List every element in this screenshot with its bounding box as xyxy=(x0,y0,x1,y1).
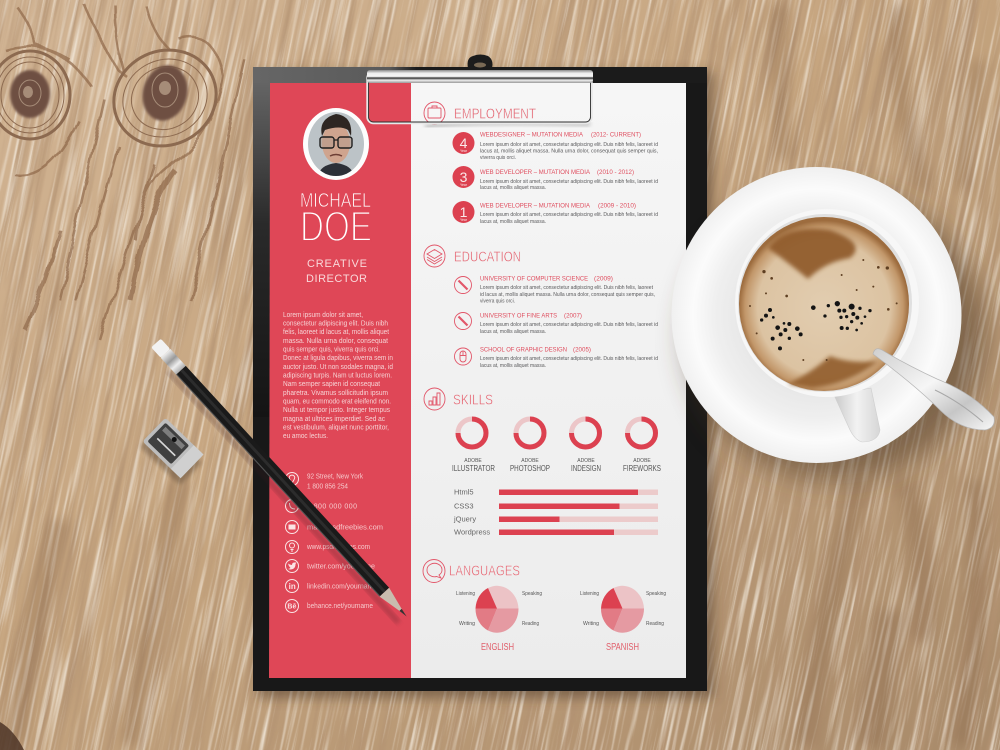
bar: wordpress xyxy=(454,528,658,537)
school entry 2: Lorem ipsum dolor sit amet, consectetur adipiscing elit. Duis nibh felis, laoreet id xyxy=(480,322,658,328)
job entry 1: (2012- CURRENT) xyxy=(591,132,641,138)
heading: education: EDUCATION xyxy=(454,248,521,266)
job title: DIRECTOR xyxy=(306,273,367,285)
school entry 2: (2007) xyxy=(564,312,582,320)
icon: speech bubble xyxy=(423,560,445,582)
job entry 2: (2010 - 2012) xyxy=(597,169,634,176)
pie chart: english: Speaking xyxy=(522,591,542,597)
school entry 3 xyxy=(454,346,658,369)
donut labels: INDESIGN xyxy=(571,464,601,473)
profile paragraph: Lorem ipsum dolor sit amet, xyxy=(283,312,363,319)
icon: layers xyxy=(424,245,445,267)
pencil body xyxy=(176,366,389,597)
profile paragraph: consectetur adipiscing elit. Duis nibh xyxy=(283,320,388,328)
heading: employment: EMPLOYMENT xyxy=(454,106,536,122)
school entry 1: Lorem ipsum dolor sit amet, consectetur adipiscing elit. Duis nibh felis, laoreet xyxy=(480,285,654,291)
job entry 1 xyxy=(452,132,658,161)
name xyxy=(300,190,372,251)
profile paragraph xyxy=(283,312,393,440)
contact: linkedin: in xyxy=(289,582,296,591)
donut labels: ILLUSTRATOR xyxy=(452,464,495,473)
school entry 2: lacus at, mollis aliquet massa. xyxy=(480,329,546,335)
job entry 2 xyxy=(452,166,658,191)
contact list xyxy=(286,472,383,612)
donut labels: PHOTOSHOP xyxy=(510,464,550,473)
job entry 3: Lorem ipsum dolor sit amet, consectetur adipiscing elit. Duis nibh felis, laoreet id xyxy=(480,212,658,218)
contact: linkedin xyxy=(286,580,377,592)
contact: behance xyxy=(286,600,373,612)
profile photo xyxy=(303,108,369,180)
skill bars xyxy=(453,488,658,537)
spoon xyxy=(873,349,994,430)
profile paragraph: est vestibulum, aliquet nunc porttitor, xyxy=(283,424,389,432)
school entry 3: SCHOOL OF GRAPHIC DESIGN xyxy=(480,346,567,354)
job entry 1: Year xyxy=(460,149,468,153)
job entry 3: lacus at, mollis aliquet massa. xyxy=(480,219,546,225)
clipboard board xyxy=(253,67,714,698)
wood knots xyxy=(0,33,232,163)
bar: wordpress: Wordpress xyxy=(454,528,490,537)
icon: bar chart xyxy=(424,388,445,410)
donut: fireworks xyxy=(628,419,656,447)
donut labels xyxy=(452,458,661,473)
job entry 1: WEBDESIGNER – MUTATION MEDIA xyxy=(480,132,584,138)
pie chart: spanish xyxy=(580,586,666,653)
profile paragraph: Nam semper sapien id consequat xyxy=(283,381,380,388)
school entry 1: id lacus at, mollis aliquet massa. Nulla urna dolor, consequat quis semper quis, xyxy=(480,292,655,298)
pencil sharpener xyxy=(139,418,207,485)
section: languages xyxy=(423,560,666,653)
profile paragraph: adipiscing turpis. Nam ut luctus lorem. xyxy=(283,372,392,380)
contact: phone: 1 800 000 000 xyxy=(307,504,357,510)
contact: address: 92 Street, New York xyxy=(307,474,363,480)
contact: email: mail@psdfreebies.com xyxy=(307,524,383,532)
coffee xyxy=(739,217,909,391)
contact: twitter: twitter.com/yourname xyxy=(307,564,375,570)
school entry 1: (2009) xyxy=(594,276,613,282)
job entry 3: Year xyxy=(460,218,468,222)
contact: linkedin: linkedin.com/yourname xyxy=(307,584,377,590)
heading: skills: SKILLS xyxy=(453,392,493,408)
contact: behance: Bē xyxy=(287,604,296,611)
contact: address: 1 800 856 254 xyxy=(307,484,348,490)
saucer shadow xyxy=(685,190,985,480)
job entry 3: (2009 - 2010) xyxy=(598,202,636,210)
contact: website: www.psdfreebies.com xyxy=(306,544,370,551)
job entry 2: lacus at, mollis aliquet massa. xyxy=(480,185,546,191)
pie chart: spanish: Listening xyxy=(580,591,599,597)
pie chart: spanish: Writing xyxy=(583,621,599,627)
donut labels: ADOBE xyxy=(521,458,539,464)
job entry 3: WEB DEVELOPER – MUTATION MEDIA xyxy=(480,202,591,210)
heading: languages: LANGUAGES xyxy=(449,562,520,580)
contact: behance: behance.net/yourname xyxy=(307,603,373,610)
pie chart: english: Writing xyxy=(459,621,475,627)
pie chart: spanish: Speaking xyxy=(646,591,666,597)
profile paragraph: Donec at ligula dapibus, viverra sem in xyxy=(283,355,393,362)
bar: html5: Html5 xyxy=(454,488,474,497)
profile paragraph: eu amoc lectus. xyxy=(283,433,328,440)
coffee cup and saucer xyxy=(672,167,994,480)
saucer xyxy=(672,167,962,463)
pie chart: english: Listening xyxy=(456,591,475,597)
icon: briefcase xyxy=(424,102,445,124)
job entry 2: 3 xyxy=(460,169,468,185)
school entry 1: viverra quis orci. xyxy=(480,298,515,304)
job entry 3 xyxy=(452,201,658,225)
ferrule xyxy=(161,349,186,375)
metal clip xyxy=(367,54,593,127)
profile paragraph: massa. Nulla urna dolor, consequat xyxy=(283,338,388,345)
donut labels: ADOBE xyxy=(633,458,651,464)
pencil xyxy=(151,339,411,625)
donut labels: ADOBE xyxy=(464,458,482,464)
section: education xyxy=(424,245,658,369)
panel: red sidebar xyxy=(269,83,411,678)
cup rim xyxy=(735,209,919,397)
job entry 2: Lorem ipsum dolor sit amet, consectetur adipiscing elit. Duis nibh felis, laoreet id xyxy=(480,179,658,185)
profile paragraph: quis semper quis, viverra quis orci. xyxy=(283,346,380,354)
school entry 2: UNIVERSITY OF FINE ARTS xyxy=(480,312,558,320)
pencil tip xyxy=(380,588,405,614)
school entry 3: lacus at, mollis aliquet massa. xyxy=(480,363,546,369)
pie chart: spanish: SPANISH xyxy=(606,642,639,653)
donut: photoshop xyxy=(516,419,544,447)
school entry 1 xyxy=(454,276,655,304)
bar: css3: CSS3 xyxy=(454,502,474,510)
job entry 2: WEB DEVELOPER – MUTATION MEDIA xyxy=(480,169,591,176)
job entry 2: Year xyxy=(460,183,468,187)
school entry 2 xyxy=(454,312,658,335)
profile paragraph: auctor justo. Ut non sodales magna, id xyxy=(283,364,393,371)
school entry 3: (2005) xyxy=(573,346,591,354)
contact: address xyxy=(286,472,363,490)
job entry 1: 4 xyxy=(460,135,468,151)
bar: jquery xyxy=(453,514,658,524)
eraser xyxy=(151,339,170,358)
name: DOE xyxy=(300,203,372,251)
donut labels: FIREWORKS xyxy=(623,464,661,473)
pie chart: english: Reading xyxy=(522,621,539,627)
paper sheet xyxy=(411,83,686,678)
profile paragraph: magna at ultrices imperdiet. Sed ac xyxy=(283,416,385,423)
section: skills xyxy=(424,388,661,537)
bar: html5 xyxy=(454,488,658,497)
pie chart: spanish: Reading xyxy=(646,621,664,627)
profile paragraph: Nulla ut tempor justo. Integer tempus xyxy=(283,407,390,414)
job entry 3: 1 xyxy=(460,204,468,220)
bar: css3 xyxy=(454,502,658,510)
job entry 1: viverra quis orci. xyxy=(480,155,516,161)
name: MICHAEL xyxy=(300,190,371,212)
job title xyxy=(306,258,367,285)
donut labels: ADOBE xyxy=(577,458,595,464)
donut: indesign xyxy=(572,419,600,447)
job entry 1: Lorem ipsum dolor sit amet, consectetur adipiscing elit. Duis nibh felis, laoreet id xyxy=(480,142,658,148)
bar: jquery: jQuery xyxy=(453,514,476,524)
cup handle xyxy=(834,388,880,442)
school entry 1: UNIVERSITY OF COMPUTER SCIENCE xyxy=(480,276,589,282)
profile paragraph: quam, eu commodo erat eleifend non. xyxy=(283,398,391,406)
pie chart: english: ENGLISH xyxy=(481,642,514,653)
pie chart: english xyxy=(456,586,542,653)
section: employment xyxy=(424,102,658,225)
donut: illustrator xyxy=(458,419,486,447)
job entry 1: lacus at, mollis aliquet massa. Nulla urna dolor, consequat quis semper quis, xyxy=(480,148,658,154)
donut charts xyxy=(458,419,656,447)
school entry 3: Lorem ipsum dolor sit amet, consectetur adipiscing elit. Duis nibh felis, laoreet id xyxy=(480,356,658,362)
profile paragraph: pharetra. Vivamus sollicitudin ipsum xyxy=(283,390,388,397)
job title: CREATIVE xyxy=(307,258,367,270)
profile paragraph: felis, laoreet id lacus at, mollis aliquet xyxy=(283,329,389,336)
